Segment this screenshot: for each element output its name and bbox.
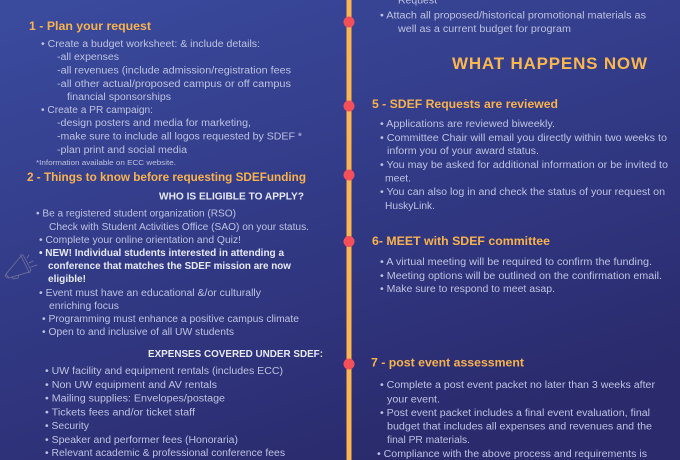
text block: eligibility: • NEW! Individual students interested in attending a xyxy=(39,248,284,259)
text block: step 6: • A virtual meeting will be required to confirm the funding. xyxy=(380,257,652,268)
text block: plan your request: • Create a budget worksheet: & include details: xyxy=(41,39,260,50)
text block: eligibility: • Open to and inclusive of all UW students xyxy=(42,327,234,338)
text block: eligibility: Check with Student Activities Office (SAO) on your status. xyxy=(49,222,309,233)
text block: plan your request: -design posters and media for marketing, xyxy=(57,118,251,129)
text block: expenses: • Non UW equipment and AV rentals xyxy=(45,380,217,391)
text block: step 5: inform you of your award status. xyxy=(387,146,539,157)
text block: eligibility: • Be a registered student organization (RSO) xyxy=(36,208,236,220)
text block: expenses: • Speaker and performer fees (Honoraria) xyxy=(45,435,238,446)
text block: step 6: • Meeting options will be outlined on the confirmation email. xyxy=(380,271,662,282)
text block: plan your request: -all expenses xyxy=(57,52,119,63)
subheading: eligibility: WHO IS ELIGIBLE TO APPLY? xyxy=(159,192,304,202)
text block: eligibility: conference that matches the SDEF mission are now xyxy=(48,261,291,272)
text block: step 7 xyxy=(377,380,656,460)
text block: step 5: meet. xyxy=(385,174,411,184)
footnote: *Information available on ECC website. xyxy=(36,160,176,167)
text block: plan your request: -make sure to include all logos requested by SDEF * xyxy=(57,132,302,142)
text block: plan your request xyxy=(41,39,302,156)
text block: step 5: • You can also log in and check the status of your request on xyxy=(380,187,665,198)
heading: step 7: 7 - post event assessment xyxy=(371,356,524,370)
text block: step 7: • Compliance with the above process and requirements is xyxy=(377,449,647,460)
text block: eligibility: • Complete your online orientation and Quiz! xyxy=(39,235,241,246)
text block: step 7: your event. xyxy=(387,394,440,406)
text block: step 5: HuskyLink. xyxy=(385,201,435,212)
heading: what happens now: WHAT HAPPENS NOW xyxy=(452,54,648,73)
text block: plan your request: -all revenues (include admission/registration fees xyxy=(57,66,291,76)
icon: megaphone xyxy=(5,255,37,279)
left column: steps 1 and 2 xyxy=(27,19,323,459)
text block: step 7: • Post event packet includes a final event evaluation, final xyxy=(380,408,650,419)
text block: eligibility xyxy=(36,208,309,338)
text block: step 6: • Make sure to respond to meet asap. xyxy=(380,284,555,295)
text block: step 7: • Complete a post event packet no later than 3 weeks after xyxy=(380,380,656,391)
text block: step 5 xyxy=(380,119,668,212)
subheading: expenses: EXPENSES COVERED UNDER SDEF: xyxy=(148,349,323,360)
text block: expenses xyxy=(45,366,285,459)
text block: eligibility: • Programming must enhance a positive campus climate xyxy=(42,314,299,325)
text block: step 7: budget that includes all expenses and revenues and the xyxy=(387,422,652,432)
heading: step 1: 1 - Plan your request xyxy=(29,19,151,33)
text block: expenses: • UW facility and equipment rentals (includes ECC) xyxy=(45,366,283,377)
text block: plan your request: • Create a PR campaign: xyxy=(41,105,153,116)
text block: step 5: • You may be asked for additional information or be invited to xyxy=(380,160,668,171)
heading: step 5: 5 - SDEF Requests are reviewed xyxy=(372,97,558,111)
text block: expenses: • Security xyxy=(45,421,89,432)
text block: step 4 continued xyxy=(380,0,646,35)
text block: eligibility: • Event must have an educational &/or culturally xyxy=(39,288,261,299)
text block: plan your request: financial sponsorships xyxy=(67,92,171,103)
text block: plan your request: -plan print and social media xyxy=(57,145,187,156)
text block: eligibility: enriching focus xyxy=(49,301,119,312)
timeline xyxy=(344,0,354,460)
text block: expenses: • Mailing supplies: Envelopes/postage xyxy=(45,394,225,404)
text block: step 6 xyxy=(380,257,662,295)
text block: step 5: • Committee Chair will email you directly within two weeks to xyxy=(380,133,667,144)
text block: step 4 continued: well as a current budget for program xyxy=(397,24,571,35)
text block: plan your request: -all other actual/proposed campus or off campus xyxy=(57,79,291,90)
text block: expenses: • Relevant academic & professional conference fees xyxy=(45,448,285,459)
text block: step 5: • Applications are reviewed biweekly. xyxy=(380,119,555,130)
heading: step 6: 6- MEET with SDEF committee xyxy=(372,234,550,248)
text block: eligibility: eligible! xyxy=(48,274,86,285)
heading: step 2: 2 - Things to know before requesting SDEFunding xyxy=(27,170,306,184)
text block: step 4 continued: • Attach all proposed/historical promotional materials as xyxy=(380,10,646,22)
right column: steps 4 to 7 xyxy=(371,0,668,460)
text block: step 7: final PR materials. xyxy=(387,435,470,446)
text block: expenses: • Tickets fees and/or ticket staff xyxy=(45,408,195,418)
